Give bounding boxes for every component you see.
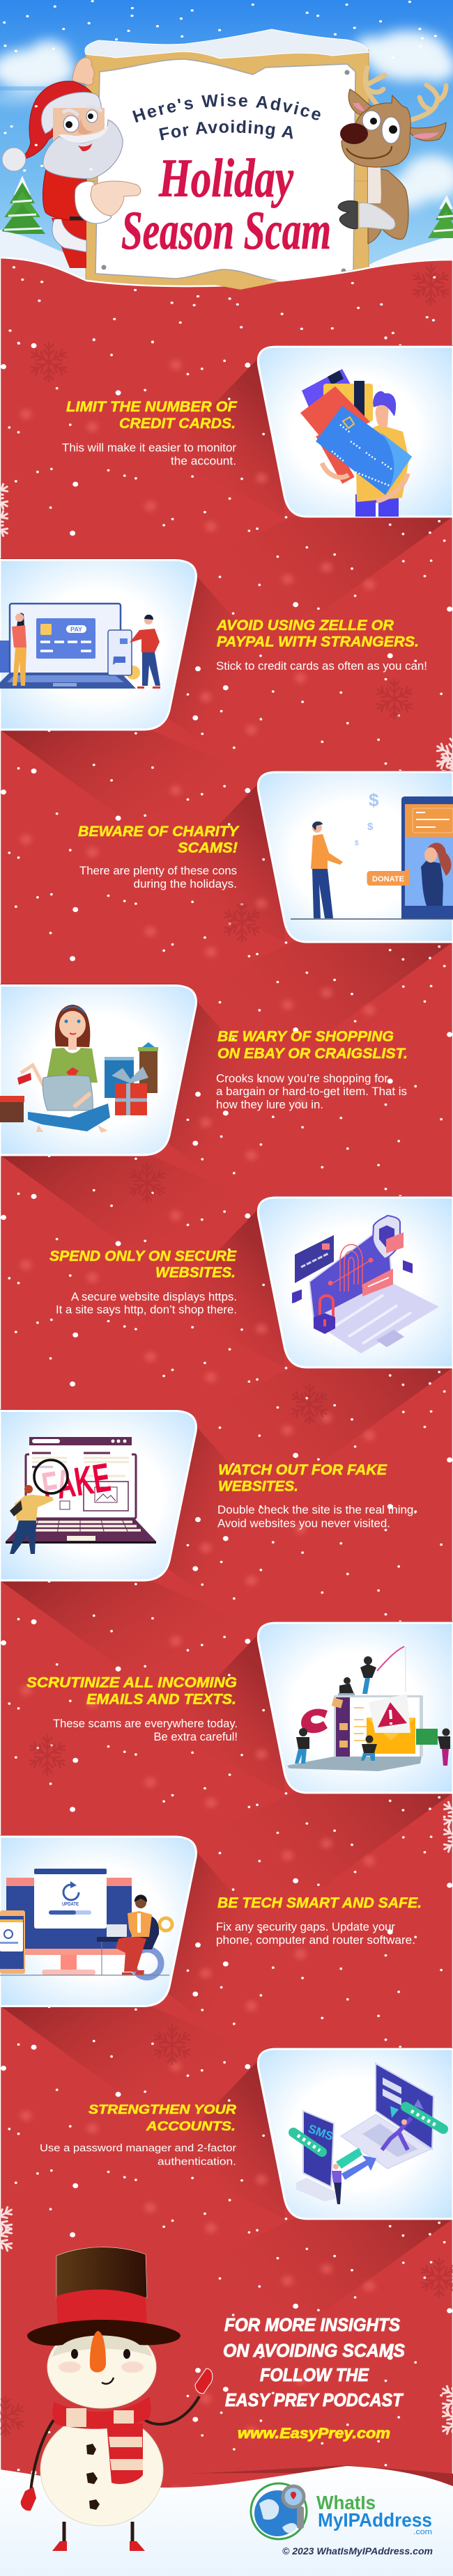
icon: woman with laptop and gifts (0, 1005, 158, 1133)
text: zelle paypal: AVOID USING ZELLE OR (216, 618, 394, 634)
text: limit credit cards (62, 399, 238, 468)
wooden sign board (86, 50, 369, 290)
icon: santa (2, 58, 141, 268)
text: ebay craigslist: ON EBAY OR CRAIGSLIST. (217, 1046, 408, 1062)
icon: software update (0, 1869, 172, 1977)
icon: donate phone (291, 790, 453, 919)
text: scrutinize emails: Be extra careful! (153, 1731, 238, 1743)
title: script (121, 148, 331, 260)
text: charity scams: SCAMS! (178, 840, 238, 856)
text: strengthen accounts: STRENGTHEN YOUR (89, 2103, 236, 2116)
icon: donate phone: $ (369, 790, 379, 810)
logo: WhatIsMyIPAddress: .com (413, 2528, 432, 2536)
icon: software update: UPDATE (62, 1902, 79, 1907)
text: secure websites: A secure website displays https. (71, 1291, 237, 1303)
text: ebay craigslist: Crooks know you’re shopping for (216, 1072, 389, 1085)
panel: ebay craigslist (0, 984, 196, 1155)
pine tree left (0, 175, 45, 234)
text: charity scams: during the holidays. (134, 878, 237, 890)
panel: scrutinize emails (258, 1621, 453, 1793)
text: tech smart: phone, computer and router software. (216, 1934, 415, 1947)
text: ebay craigslist: how they lure you in. (216, 1099, 323, 1111)
text: limit credit cards: CREDIT CARDS. (119, 416, 236, 432)
panel: zelle paypal (0, 558, 196, 730)
text: scrutinize emails: EMAILS AND TEXTS. (86, 1692, 236, 1707)
icon: laptop payment: PAY (70, 626, 82, 633)
header sky background (0, 0, 453, 292)
logo: WhatIsMyIPAddress (251, 2483, 432, 2539)
text: strengthen accounts (40, 2103, 236, 2168)
text: charity scams: BEWARE OF CHARITY (78, 824, 240, 840)
text: scrutinize emails: These scams are everywhere today. (53, 1718, 238, 1730)
text: zelle paypal: Stick to credit cards as often as you can! (216, 660, 427, 673)
snowflakes white at edges (0, 477, 453, 2441)
icon: donate phone: DONATE (372, 875, 404, 883)
paper scroll (95, 59, 355, 281)
text: zelle paypal (216, 618, 427, 673)
text: ebay craigslist: a bargain or hard-to-get item. That is (216, 1085, 407, 1098)
call to action: FOR MORE INSIGHTS (224, 2314, 401, 2335)
title: script: Holiday (158, 148, 293, 208)
diagonal shadows (0, 355, 453, 2332)
logo: WhatIsMyIPAddress: WhatIs (316, 2492, 376, 2513)
icon: phishing email (287, 1647, 450, 1771)
panel: tech smart (0, 1835, 196, 2006)
text: tech smart: Fix any security gaps. Update your (216, 1921, 395, 1933)
icon: donate phone: $ (355, 840, 359, 847)
text: zelle paypal: PAYPAL WITH STRANGERS. (217, 634, 419, 650)
pine tree right (428, 195, 453, 238)
text: secure websites (49, 1248, 237, 1317)
text: tech smart (216, 1895, 422, 1947)
icon: two-factor authentication: SMS (307, 2122, 335, 2143)
title: script: Season Scam (121, 200, 331, 260)
text: limit credit cards: LIMIT THE NUMBER OF (66, 399, 238, 415)
text: fake websites: Avoid websites you never visited. (217, 1518, 390, 1530)
icon: fake website laptop: FAKE (39, 1454, 114, 1510)
panel: secure websites (258, 1196, 453, 1367)
text: limit credit cards: the account. (171, 455, 236, 468)
text: charity scams: There are plenty of these cons (79, 865, 237, 877)
snow cap on sign (85, 29, 369, 58)
text: fake websites (217, 1462, 417, 1530)
icon: man holding credit cards (300, 369, 412, 517)
title: arched intro: Here's Wise Advice (132, 93, 321, 123)
text: ebay craigslist (216, 1029, 408, 1111)
text: strengthen accounts: Use a password manager and 2-factor (40, 2143, 236, 2154)
panel: limit credit cards (258, 345, 453, 517)
copyright: © 2023 WhatIsMyIPAddress.com (282, 2545, 433, 2557)
text: ebay craigslist: BE WARY OF SHOPPING (217, 1029, 394, 1044)
panel: charity scams (258, 771, 453, 942)
call to action (223, 2314, 406, 2442)
text: secure websites: It a site says http, don’t shop there. (56, 1304, 237, 1317)
call to action: www.EasyPrey.com (238, 2426, 390, 2442)
icon: secure laptop (292, 1216, 439, 1353)
text: strengthen accounts: authentication. (158, 2157, 236, 2168)
title: arched intro: For Avoiding A (159, 120, 293, 141)
icon: fake website laptop (6, 1437, 156, 1554)
snowdrift foreground left (0, 231, 86, 285)
text: scrutinize emails: SCRUTINIZE ALL INCOMING (26, 1675, 237, 1690)
logo: WhatIsMyIPAddress: MyIPAddress (318, 2509, 432, 2531)
text: scrutinize emails (26, 1675, 238, 1743)
panel: fake websites (0, 1409, 196, 1580)
call to action: EASY PREY PODCAST (225, 2389, 404, 2410)
icon: snowman (21, 2247, 213, 2551)
text: secure websites: SPEND ONLY ON SECURE (49, 1248, 237, 1264)
call to action: ON AVOIDING SCAMS (223, 2340, 406, 2361)
title: arched intro (132, 93, 321, 141)
snow hills (0, 230, 453, 292)
text: fake websites: WEBSITES. (218, 1479, 298, 1494)
text: fake websites: WATCH OUT FOR FAKE (218, 1462, 387, 1478)
text: charity scams (78, 824, 240, 890)
text: secure websites: WEBSITES. (155, 1264, 236, 1281)
wood tip under wave (199, 281, 282, 290)
text: limit credit cards: This will make it easier to monitor (62, 441, 237, 454)
icon: laptop payment (0, 604, 160, 689)
icon: reindeer (338, 68, 446, 244)
text: fake websites: Double check the site is the real thing. (217, 1504, 417, 1516)
snowy ground (0, 2465, 453, 2576)
icon: two-factor authentication (293, 2064, 443, 2204)
panel: strengthen accounts (258, 2048, 453, 2219)
call to action: FOLLOW THE (260, 2364, 369, 2385)
icon: donate phone: $ (367, 821, 374, 833)
text: tech smart: BE TECH SMART AND SAFE. (217, 1895, 422, 1911)
text: strengthen accounts: ACCOUNTS. (146, 2119, 236, 2133)
